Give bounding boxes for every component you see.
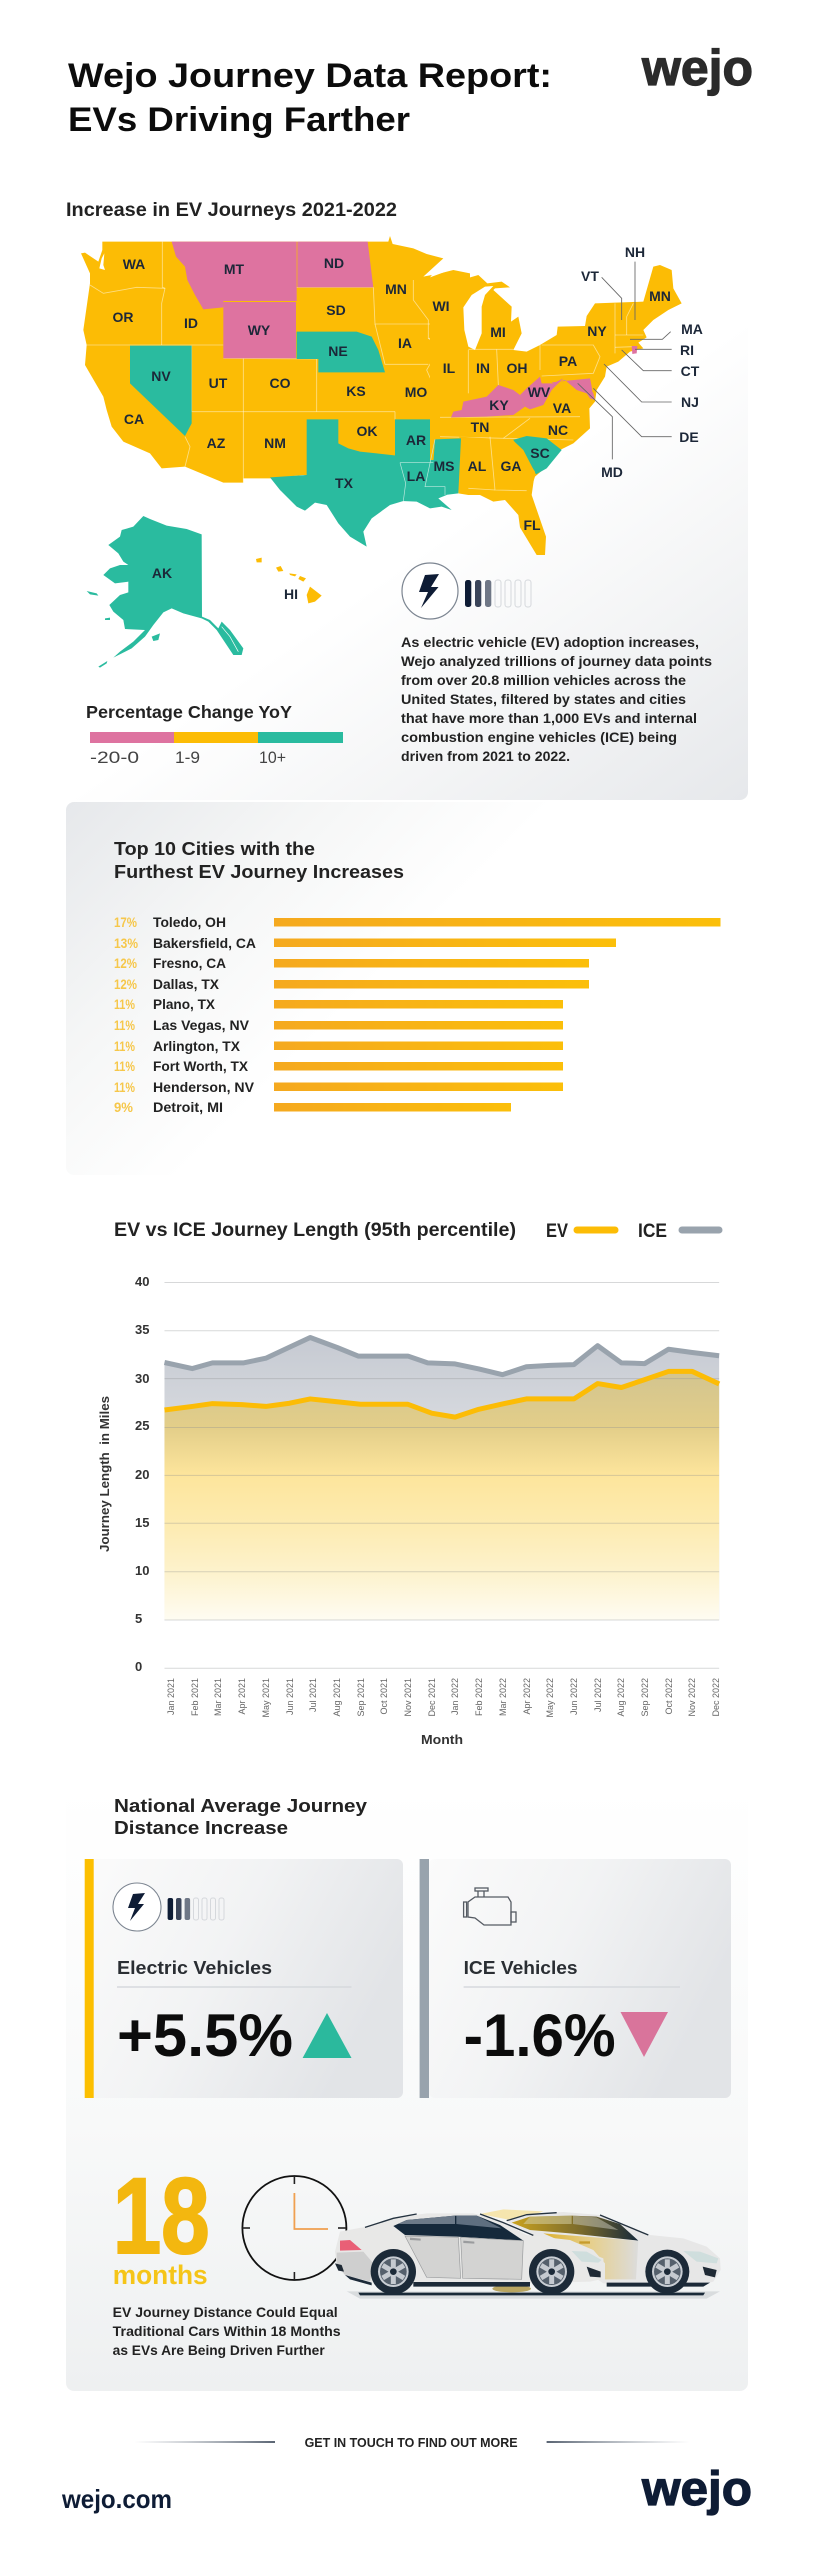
website: wejo.com [61, 2484, 172, 2514]
x axis month labels [166, 1678, 721, 1747]
chart legend [546, 1221, 719, 1242]
bar chart: top 10 cities: Detroit, MI [153, 1100, 223, 1115]
bar chart: top 10 cities: 11% [114, 997, 135, 1012]
map legend: Percentage Change YoY [86, 702, 292, 722]
x axis month labels: Jan 2022 [450, 1678, 460, 1715]
heading: top cities [114, 839, 404, 882]
map legend [86, 702, 343, 767]
x axis month labels: Mar 2022 [498, 1678, 508, 1716]
state labels: RI [680, 342, 694, 358]
state labels: IN [476, 360, 490, 376]
state labels: KS [346, 383, 366, 399]
heading: top cities: Furthest EV Journey Increases [114, 862, 404, 882]
y axis labels: 5 [135, 1611, 142, 1626]
state labels: FL [523, 517, 541, 533]
text block: intro: that have more than 1,000 EVs and internal [401, 710, 697, 726]
chart legend: EV [546, 1221, 568, 1242]
stat: 18 months: 18 [113, 2155, 210, 2276]
x axis month labels: Dec 2022 [711, 1678, 721, 1717]
bar chart: top 10 cities: 12% [114, 956, 137, 971]
y axis labels: 0 [135, 1659, 142, 1674]
bar chart: top 10 cities: 11% [114, 1018, 135, 1033]
icon: clock [242, 2176, 346, 2280]
state labels: UT [209, 375, 228, 391]
bar chart: top 10 cities: 11% [114, 1059, 135, 1074]
state labels: SD [326, 302, 346, 318]
card: ICE vehicles: ICE Vehicles [464, 1958, 578, 1978]
state labels: WA [123, 256, 145, 272]
map: Alaska [87, 516, 243, 668]
text block: intro: As electric vehicle (EV) adoption increases, [401, 634, 699, 650]
state labels: LA [407, 468, 425, 484]
text block: 18 months description: as EVs Are Being Driven Further [113, 2343, 325, 2358]
state labels: ND [324, 255, 344, 271]
x axis month labels: Nov 2022 [687, 1678, 697, 1717]
card: electric vehicles: +5.5% [117, 2002, 293, 2069]
y axis labels: 40 [135, 1274, 149, 1289]
bar chart: top 10 cities: Dallas, TX [153, 977, 219, 992]
illustration: two cars [335, 2209, 721, 2299]
state labels: MA [681, 321, 703, 337]
text block: intro: Wejo analyzed trillions of journey data points [401, 653, 712, 669]
bar chart: top 10 cities: Henderson, NV [153, 1080, 254, 1095]
state labels: ID [184, 315, 198, 331]
card: electric vehicles [85, 1859, 403, 2098]
state labels: VT [581, 268, 599, 284]
heading: national average: National Average Journey [114, 1796, 367, 1816]
bar chart: top 10 cities: 11% [114, 1080, 135, 1095]
text block: intro: United States, filtered by states and cities [401, 691, 686, 707]
state labels: CT [681, 363, 700, 379]
y axis labels: 20 [135, 1467, 149, 1482]
y axis labels: 15 [135, 1515, 149, 1530]
title: Wejo Journey Data Report: [68, 57, 552, 95]
x axis month labels: Oct 2021 [379, 1678, 389, 1715]
state labels: AK [152, 565, 172, 581]
state labels: GA [500, 458, 522, 474]
map legend: -20-0 [90, 748, 139, 767]
y axis labels [98, 1274, 149, 1674]
state labels: SC [530, 445, 550, 461]
x axis month labels: Nov 2021 [403, 1678, 413, 1717]
icon: engine [464, 1888, 516, 1925]
text block: intro [401, 634, 712, 764]
state labels: NC [548, 422, 568, 438]
state labels: WV [528, 384, 551, 400]
title [68, 57, 552, 139]
x axis month labels: Sep 2021 [356, 1678, 366, 1717]
heading: top cities: Top 10 Cities with the [114, 839, 315, 859]
chart areas and lines [164, 1282, 719, 1668]
heading: map: Increase in EV Journeys 2021-2022 [66, 200, 397, 221]
icon: EV bolt and battery small [113, 1883, 224, 1931]
front car [335, 2213, 605, 2294]
state labels: HI [284, 586, 298, 602]
state labels: AZ [207, 435, 226, 451]
bar chart: top 10 cities: Plano, TX [153, 997, 215, 1012]
state labels: IL [443, 360, 456, 376]
bar chart: top 10 cities: 9% [114, 1100, 133, 1115]
state labels: NE [328, 343, 348, 359]
x axis month labels: Jan 2021 [166, 1678, 176, 1715]
state labels: AR [406, 432, 426, 448]
line chart: EV vs ICE journey length [98, 1274, 721, 1747]
panel: map background [66, 320, 748, 800]
rear car [480, 2209, 721, 2294]
x axis month labels: Apr 2022 [522, 1678, 532, 1715]
x axis month labels: Month [421, 1733, 463, 1747]
bar chart: top 10 cities: Fort Worth, TX [153, 1059, 248, 1074]
map gulf states and Florida [270, 419, 546, 555]
map west [81, 236, 470, 490]
map east [430, 262, 682, 487]
state labels: CO [270, 375, 291, 391]
state labels: VA [553, 400, 571, 416]
title: EVs Driving Farther [68, 101, 410, 139]
state labels: NH [625, 244, 645, 260]
map: Hawaii [256, 558, 322, 603]
x axis month labels: Jun 2022 [569, 1678, 579, 1715]
state labels: NJ [681, 394, 699, 410]
text block: 18 months description: Traditional Cars Within 18 Months [113, 2324, 341, 2339]
state labels: OK [356, 423, 378, 439]
x axis month labels: Dec 2021 [427, 1678, 437, 1717]
stat: 18 months: months [113, 2260, 208, 2290]
state labels: PA [559, 353, 577, 369]
state labels: DE [679, 429, 699, 445]
x axis month labels: Oct 2022 [664, 1678, 674, 1715]
bar chart: top 10 cities: 11% [114, 1039, 135, 1054]
x axis month labels: Apr 2021 [237, 1678, 247, 1715]
bar chart: top 10 cities: Fresno, CA [153, 956, 226, 971]
panel: top cities background [66, 802, 748, 1175]
state labels: MS [434, 458, 454, 474]
card: ICE vehicles: -1.6% [464, 2002, 616, 2069]
state labels: MO [405, 384, 427, 400]
ground shadow [347, 2285, 720, 2299]
state labels: MD [601, 464, 623, 480]
y axis labels: 35 [135, 1322, 149, 1337]
icon: EV bolt and battery [402, 563, 531, 619]
state labels: AL [468, 458, 487, 474]
state labels [112, 244, 703, 602]
y axis labels: Journey Length in Miles [98, 1396, 112, 1552]
x axis month labels: Mar 2021 [213, 1678, 223, 1716]
heading: national average: Distance Increase [114, 1818, 288, 1838]
bar chart: top 10 cities: 12% [114, 977, 137, 992]
state labels: MT [224, 261, 245, 277]
state labels: MI [490, 324, 506, 340]
text block: intro: combustion engine vehicles (ICE) being [401, 729, 677, 745]
map legend: 1-9 [175, 748, 200, 767]
heading: EV vs ICE chart: EV vs ICE Journey Length (95th percentile) [114, 1220, 516, 1241]
state labels: KY [489, 397, 509, 413]
card: ICE vehicles [420, 1859, 731, 2098]
bar chart: top 10 cities [114, 915, 720, 1115]
bar chart: top 10 cities: 13% [114, 936, 138, 951]
bar chart: top 10 cities: 17% [114, 915, 137, 930]
state labels: MN [649, 288, 671, 304]
chart legend: ICE [638, 1221, 667, 1242]
x axis month labels: Jul 2021 [308, 1678, 318, 1712]
call to action: GET IN TOUCH TO FIND OUT MORE [305, 2436, 518, 2450]
state labels: TN [471, 419, 489, 435]
x axis month labels: Jun 2021 [285, 1678, 295, 1715]
text block: intro: from over 20.8 million vehicles across the [401, 672, 686, 688]
x axis month labels: Sep 2022 [640, 1678, 650, 1717]
state labels: WI [432, 298, 450, 314]
state labels: NY [587, 323, 607, 339]
bar chart: top 10 cities: Bakersfield, CA [153, 936, 256, 951]
logo: wejo top: wejo [641, 40, 753, 96]
x axis month labels: Feb 2021 [190, 1678, 200, 1716]
x axis month labels: Aug 2022 [616, 1678, 626, 1717]
heading: national average [114, 1796, 367, 1838]
y axis labels: 10 [135, 1563, 149, 1578]
state labels: NM [264, 435, 286, 451]
bar chart: top 10 cities: Las Vegas, NV [153, 1018, 249, 1033]
x axis month labels: Aug 2021 [332, 1678, 342, 1717]
panel: chart and summary background [66, 1180, 748, 2391]
x axis month labels: Jul 2022 [593, 1678, 603, 1712]
x axis month labels: Feb 2022 [474, 1678, 484, 1716]
state labels: NV [151, 368, 171, 384]
text block: intro: driven from 2021 to 2022. [401, 748, 570, 764]
text block: 18 months description: EV Journey Distance Could Equal [113, 2305, 338, 2320]
state labels: OH [506, 360, 528, 376]
y axis labels: 30 [135, 1371, 149, 1386]
bar chart: top 10 cities: Toledo, OH [153, 915, 226, 930]
state labels: IA [398, 335, 412, 351]
x axis month labels: May 2022 [545, 1678, 555, 1718]
text block: 18 months description [113, 2305, 341, 2358]
state labels: MN [385, 281, 407, 297]
state labels: TX [335, 475, 354, 491]
logo: wejo bottom: wejo [641, 2463, 752, 2516]
state labels: CA [124, 411, 144, 427]
map: US states [81, 236, 703, 668]
state labels: WY [248, 322, 271, 338]
y axis labels: 25 [135, 1418, 149, 1433]
leader lines for small states [578, 262, 672, 459]
bar chart: top 10 cities: Arlington, TX [153, 1039, 240, 1054]
map legend: 10+ [259, 748, 286, 767]
state labels: OR [112, 309, 134, 325]
x axis month labels: May 2021 [261, 1678, 271, 1718]
card: electric vehicles: Electric Vehicles [117, 1958, 272, 1978]
